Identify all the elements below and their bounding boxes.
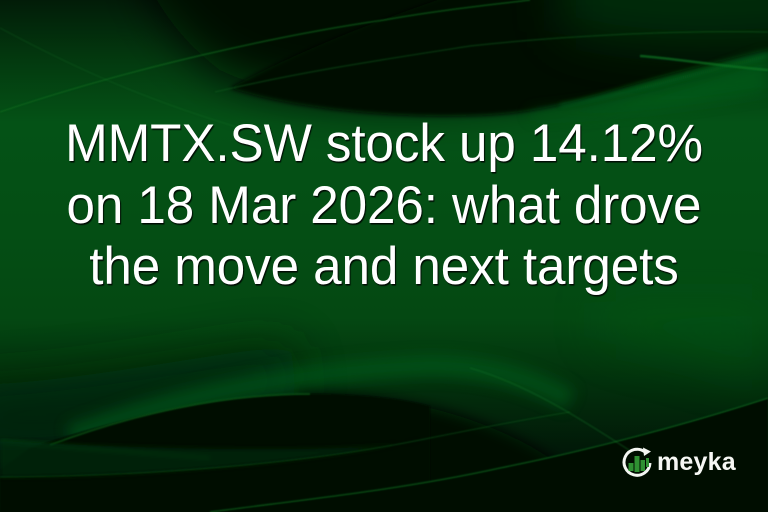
title <box>65 114 703 297</box>
title: on 18 Mar 2026: what drove <box>67 176 701 234</box>
title: MMTX.SW stock up 14.12% <box>65 114 703 173</box>
lower-left shade <box>0 345 300 450</box>
title: the move and next targets <box>89 237 679 296</box>
top dark blob soft left side <box>130 0 620 100</box>
bottom right dark <box>210 398 768 512</box>
lower glow <box>70 366 570 436</box>
dark lower hill <box>300 396 620 512</box>
icon: ring with bars <box>624 448 651 475</box>
logo: meyka <box>622 448 737 477</box>
wordmark: meyka <box>657 448 737 476</box>
